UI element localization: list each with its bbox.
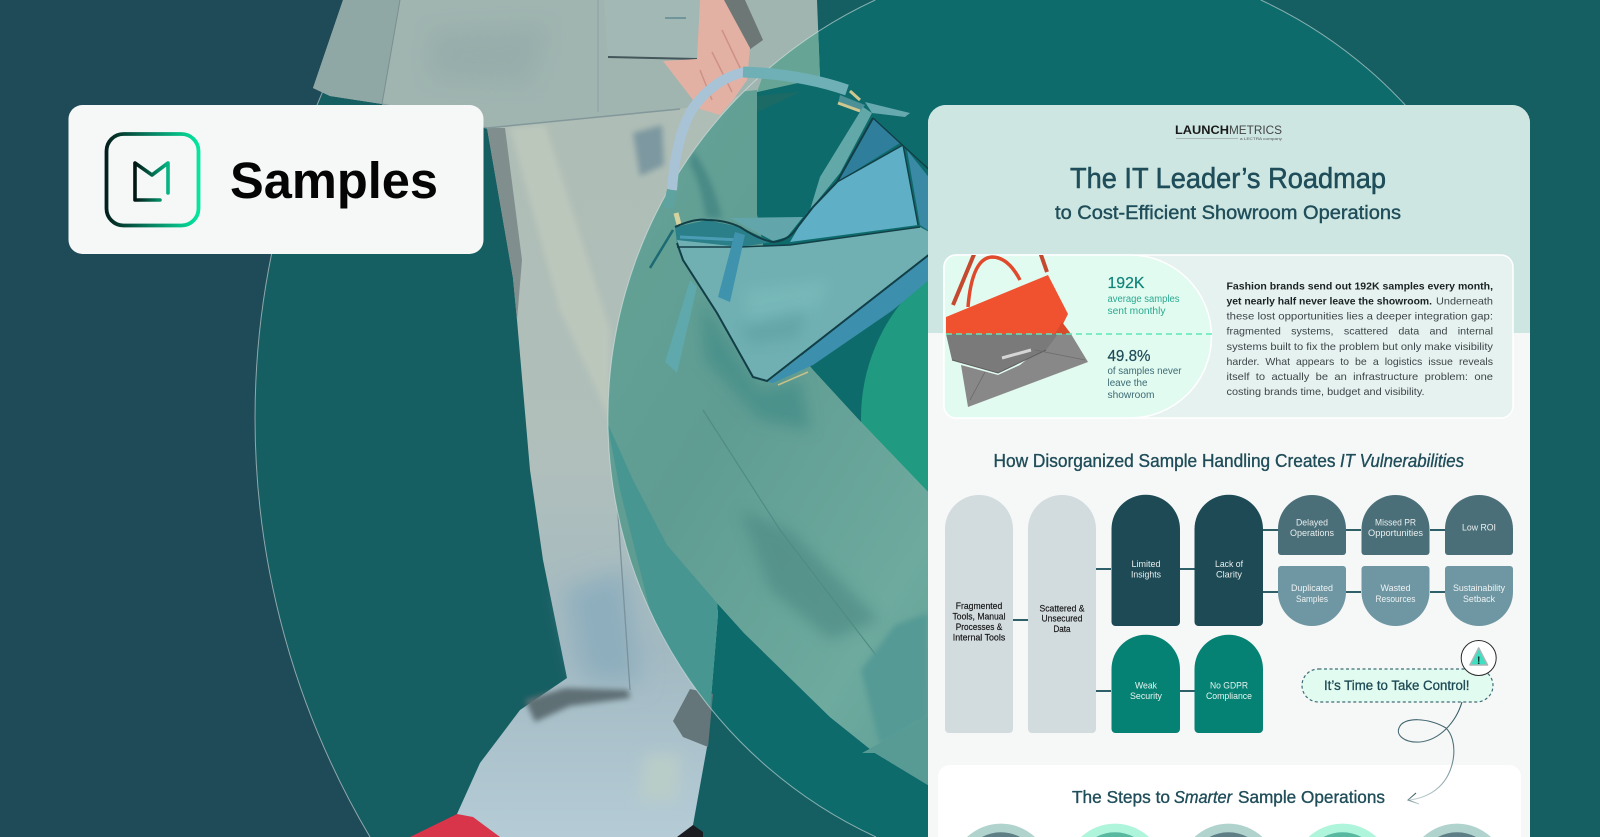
subtitle: to Cost-Efficient Showroom Operations xyxy=(1055,203,1401,224)
title: The IT Leader’s Roadmap xyxy=(1070,163,1386,195)
infographic card xyxy=(928,105,1530,837)
photo: teal handbag xyxy=(650,72,935,385)
intro paragraph: itself to actually be an infrastructure problem: one xyxy=(1226,372,1493,383)
pill: delayed operations: Delayed xyxy=(1296,518,1328,529)
stat: 49.8%: of samples never xyxy=(1108,366,1182,377)
pill: scattered data: Data xyxy=(1054,624,1071,635)
pill: weak security xyxy=(1112,635,1180,733)
icon: warning xyxy=(1461,640,1496,676)
pill: weak security: Security xyxy=(1130,691,1162,702)
brand logo: LAUNCH xyxy=(1175,123,1229,137)
heading: steps xyxy=(1072,787,1385,807)
pill: no GDPR compliance: Compliance xyxy=(1206,691,1252,702)
pill: fragmented tools: Processes & xyxy=(956,622,1003,633)
pill: lack of clarity: Lack of xyxy=(1215,559,1243,570)
brand logo xyxy=(1175,123,1282,141)
intro paragraph: harder. What appears to be a logistics issue reveals xyxy=(1226,357,1493,368)
stat: 192K: 192K xyxy=(1108,275,1145,292)
pill: duplicated samples: Duplicated xyxy=(1291,583,1333,594)
pill: scattered data xyxy=(1028,495,1096,733)
icon: warning: ! xyxy=(1477,655,1481,667)
logo badge: Samples xyxy=(68,105,484,254)
intro paragraph: these lost opportunities lies a deeper integration gap: xyxy=(1226,312,1493,322)
pill: sustainability setback xyxy=(1445,566,1513,626)
pill: lack of clarity xyxy=(1194,495,1263,626)
thin circle outline over the photo xyxy=(608,0,1528,837)
dark strap at wrist xyxy=(722,0,763,50)
sleeve cuff xyxy=(604,0,700,59)
pill: sustainability setback: Sustainability xyxy=(1453,583,1505,594)
intro paragraph: yet nearly half never leave the showroom. xyxy=(1226,296,1432,308)
icon: Launchmetrics M xyxy=(106,134,198,226)
brand logo: a LECTRA company xyxy=(1240,136,1282,141)
red sock and shoe xyxy=(410,814,500,837)
pill: limited insights xyxy=(1112,495,1180,626)
pill: low ROI xyxy=(1445,495,1513,555)
heading: steps: The Steps to xyxy=(1072,787,1170,807)
heading: vulnerabilities: IT Vulnerabilities xyxy=(1340,451,1464,471)
pill: fragmented tools: Fragmented xyxy=(956,601,1002,612)
intro paragraph: fragmented systems, scattered data and internal xyxy=(1226,326,1493,338)
flow diagram: vulnerabilities xyxy=(945,495,1513,733)
heading: steps: Sample Operations xyxy=(1238,787,1385,807)
jacket xyxy=(313,0,820,128)
step circles xyxy=(967,824,1491,837)
pill: delayed operations xyxy=(1278,495,1346,555)
callout: time to take control: It’s Time to Take Control! xyxy=(1324,678,1470,693)
intro paragraph: costing brands time, budget and visibility. xyxy=(1226,387,1424,398)
panel cover right of the card xyxy=(1530,0,1600,837)
trousers xyxy=(440,90,928,837)
pill: fragmented tools: Tools, Manual xyxy=(952,612,1006,622)
stat: 192K xyxy=(1108,275,1180,317)
panel: intro stats xyxy=(944,252,1513,418)
pill: wasted resources: Wasted xyxy=(1380,583,1410,594)
intro paragraph xyxy=(1226,282,1494,398)
pill: missed PR opportunities: Missed PR xyxy=(1375,518,1416,529)
brand logo: METRICS xyxy=(1229,123,1282,137)
dashed divider xyxy=(946,333,1212,335)
bag seams xyxy=(675,118,873,242)
arrow: to the steps xyxy=(1398,702,1462,804)
heading: vulnerabilities: How Disorganized Sample Handling Creates xyxy=(994,451,1336,471)
stat: 49.8%: showroom xyxy=(1108,390,1154,401)
pill: fragmented tools: Internal Tools xyxy=(953,632,1005,644)
intro paragraph: Fashion brands send out 192K samples every month, xyxy=(1226,282,1493,292)
stat: 49.8% xyxy=(1108,348,1182,401)
stat: 192K: sent monthly xyxy=(1108,306,1166,317)
pill: low ROI: Low ROI xyxy=(1462,523,1496,534)
callout: time to take control xyxy=(1302,640,1496,702)
pill: duplicated samples xyxy=(1278,566,1346,626)
pill: limited insights: Limited xyxy=(1132,559,1160,570)
pill: fragmented tools xyxy=(945,495,1013,733)
connectors xyxy=(1013,530,1445,691)
pill: limited insights: Insights xyxy=(1131,570,1161,581)
intro paragraph: systems built to fix the problem but only make visibility xyxy=(1226,342,1494,353)
pill: no GDPR compliance xyxy=(1194,635,1263,733)
heading: steps: Smarter xyxy=(1174,787,1233,807)
bag tassels xyxy=(718,232,745,302)
pill: wasted resources: Resources xyxy=(1376,594,1416,605)
intro paragraph: Underneath xyxy=(1436,296,1493,308)
pill: wasted resources xyxy=(1362,566,1430,626)
pill: missed PR opportunities: Opportunities xyxy=(1368,528,1423,539)
panel: steps xyxy=(938,765,1521,837)
pill: sustainability setback: Setback xyxy=(1463,594,1495,605)
pill: duplicated samples: Samples xyxy=(1296,594,1328,605)
photo: model in grey suit xyxy=(313,0,928,837)
hand xyxy=(663,0,750,115)
pill: no GDPR compliance: No GDPR xyxy=(1210,681,1248,692)
pill: missed PR opportunities xyxy=(1362,495,1430,555)
pill: scattered data: Unsecured xyxy=(1042,614,1082,625)
wordmark: Samples xyxy=(230,152,438,209)
bag top panels xyxy=(730,217,803,241)
pill: scattered data: Scattered & xyxy=(1040,604,1085,614)
pill: delayed operations: Operations xyxy=(1290,528,1334,539)
bag lower panels xyxy=(677,227,935,381)
stat: 49.8%: leave the xyxy=(1108,378,1148,389)
bag handle xyxy=(672,72,745,190)
stat: 192K: average samples xyxy=(1108,294,1180,305)
pill: lack of clarity: Clarity xyxy=(1216,570,1242,581)
picture: half red half grey handbag xyxy=(946,252,1088,407)
pill: weak security: Weak xyxy=(1135,681,1157,692)
stat: 49.8%: 49.8% xyxy=(1108,348,1151,365)
tinted part of the suit inside the circle xyxy=(608,32,928,785)
